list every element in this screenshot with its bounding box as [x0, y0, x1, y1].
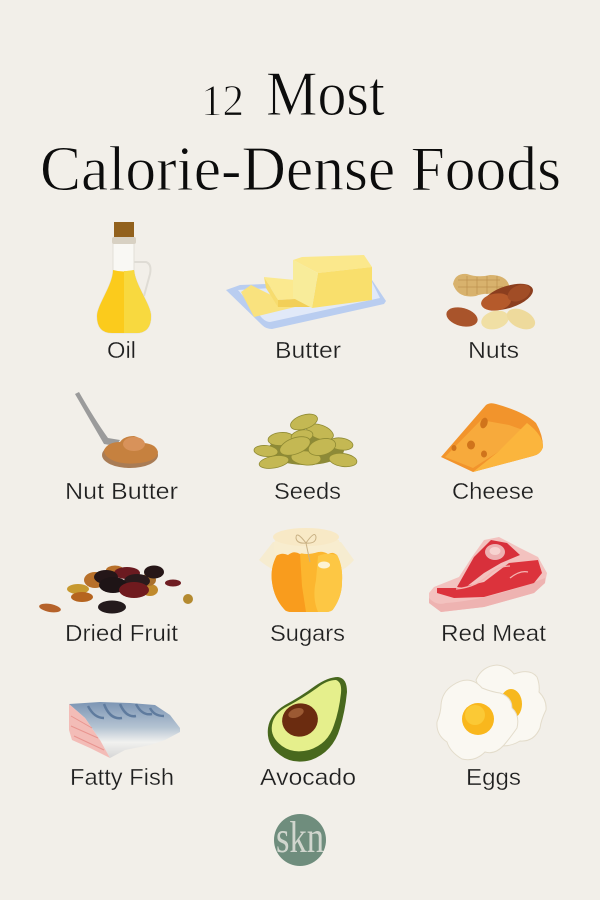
icon: cheese [441, 403, 543, 472]
icon: avocado [268, 677, 347, 762]
label: sugars: Sugars [270, 620, 345, 646]
icon: butter [226, 255, 386, 329]
label: cheese: Cheese [452, 478, 534, 504]
icon: nuts [444, 274, 538, 333]
label: fatty fish: Fatty Fish [70, 764, 174, 790]
icon: dried fruit [38, 566, 193, 614]
icon: red meat [429, 537, 547, 612]
title [40, 58, 561, 204]
icon: honey jar [259, 528, 354, 612]
icon: nut butter spoon [75, 392, 158, 468]
label: seeds: Seeds [274, 478, 341, 504]
icon: oil bottle [97, 222, 151, 333]
label: eggs: Eggs [466, 764, 521, 790]
label: nuts: Nuts [468, 337, 519, 363]
title: 12 [201, 76, 244, 125]
label: oil: Oil [107, 337, 136, 363]
label: butter: Butter [275, 337, 341, 363]
title: Calorie-Dense Foods [40, 133, 561, 204]
label: red meat: Red Meat [441, 620, 547, 646]
label: avocado: Avocado [260, 764, 356, 790]
label: nut butter: Nut Butter [65, 478, 178, 504]
title: Most [266, 58, 385, 129]
icon: fried eggs [437, 665, 546, 760]
label: dried fruit: Dried Fruit [65, 620, 179, 646]
icon: seeds [254, 411, 358, 471]
icon: fatty fish [69, 702, 180, 758]
logo: skn [276, 813, 324, 862]
